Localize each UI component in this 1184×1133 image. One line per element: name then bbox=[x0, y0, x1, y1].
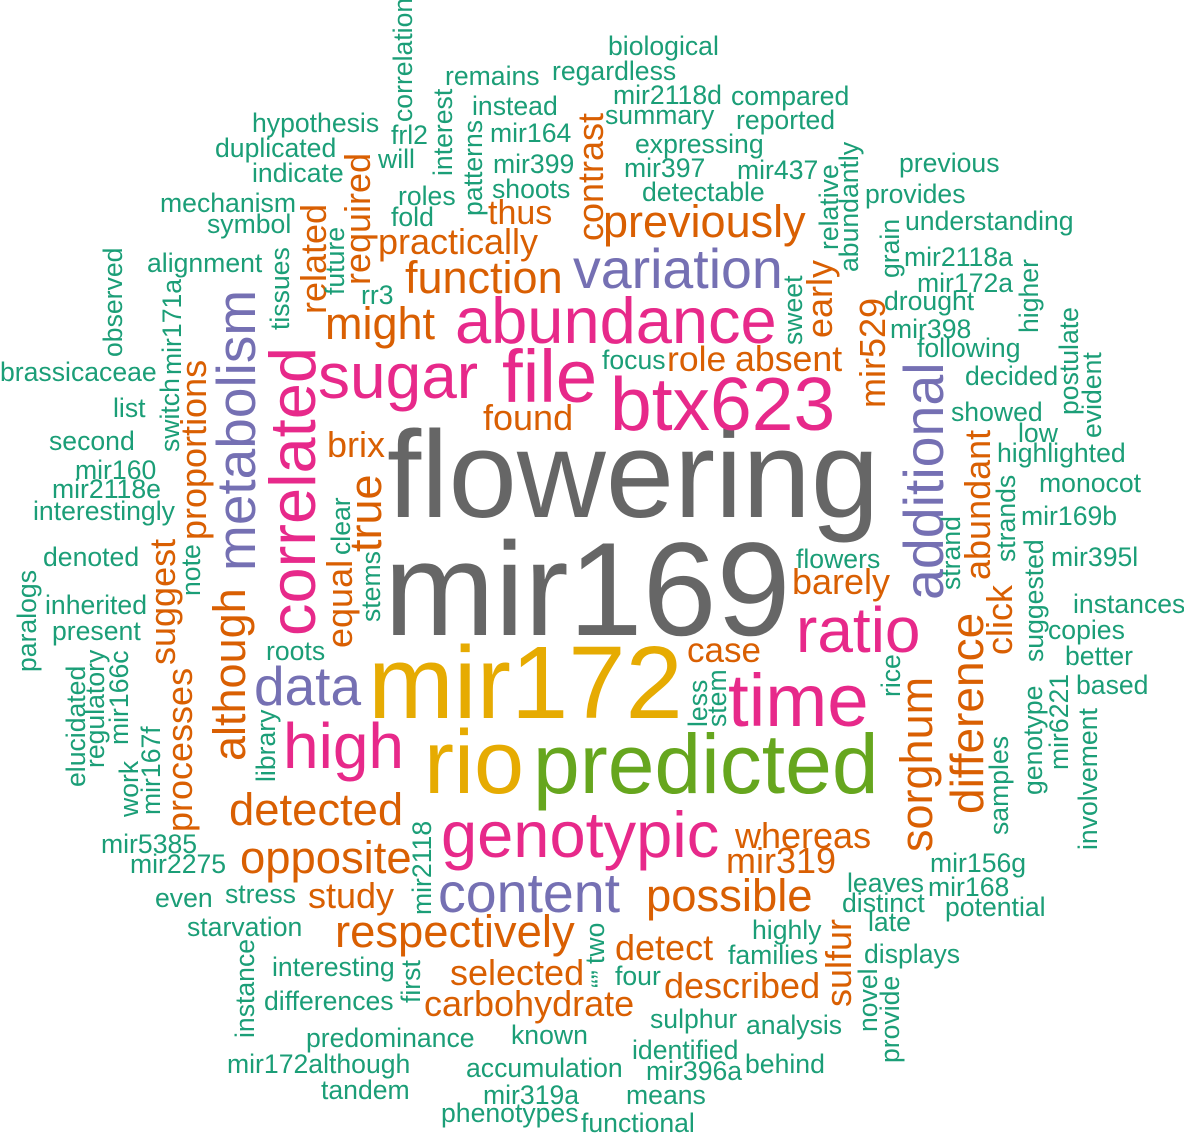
orange words: true bbox=[340, 474, 391, 552]
small green words, vertical: mir171a bbox=[157, 279, 187, 375]
pink words: abundance bbox=[455, 284, 777, 357]
small green words, vertical: “” bbox=[586, 970, 616, 988]
orange words: detect bbox=[615, 927, 713, 968]
small green words, horizontal: present bbox=[52, 616, 141, 646]
small green words, horizontal: compared bbox=[731, 81, 849, 111]
small green words, vertical: future bbox=[320, 227, 350, 295]
small green words, vertical: abundantly bbox=[834, 141, 864, 272]
small green words, horizontal: copies bbox=[1048, 615, 1125, 645]
small green words, horizontal: highlighted bbox=[997, 438, 1126, 468]
small green words, vertical: samples bbox=[984, 736, 1014, 835]
small green words, horizontal: showed bbox=[951, 397, 1043, 427]
small green words, vertical: mir2118 bbox=[407, 821, 437, 915]
small green words, horizontal: starvation bbox=[187, 912, 302, 942]
pink words: sugar bbox=[318, 340, 478, 412]
orange words: opposite bbox=[240, 832, 412, 883]
small green words, vertical: stem bbox=[702, 669, 732, 727]
small green words, horizontal: mir2275 bbox=[130, 849, 226, 879]
orange words: carbohydrate bbox=[424, 983, 634, 1024]
small green words, vertical: mir6221 bbox=[1044, 674, 1074, 770]
purple words: metabolism bbox=[205, 290, 267, 571]
small green words, horizontal: hypothesis bbox=[252, 108, 379, 138]
orange words: suggest bbox=[142, 539, 183, 665]
small green words, horizontal: fold bbox=[391, 202, 434, 232]
orange words: required bbox=[337, 153, 378, 285]
small green words, horizontal: previous bbox=[899, 148, 1000, 178]
small green words, horizontal: potential bbox=[945, 892, 1046, 922]
small green words, horizontal: sulphur bbox=[650, 1004, 737, 1034]
small green words, horizontal: duplicated bbox=[215, 133, 336, 163]
orange words: possible bbox=[646, 870, 813, 921]
orange words: sorghum bbox=[891, 677, 942, 852]
pink words: correlated bbox=[256, 347, 329, 636]
orange words: described bbox=[664, 965, 820, 1006]
small green words, horizontal: reported bbox=[736, 105, 835, 135]
small green words, horizontal: understanding bbox=[905, 206, 1074, 236]
small green words, horizontal: decided bbox=[965, 361, 1058, 391]
small green words, horizontal: displays bbox=[864, 939, 960, 969]
small green words, vertical: strands bbox=[991, 475, 1021, 562]
small green words, vertical: regulatory bbox=[80, 649, 110, 768]
small green words, horizontal: families bbox=[728, 940, 818, 970]
small green words, horizontal: inherited bbox=[45, 590, 147, 620]
small green words, vertical: observed bbox=[98, 248, 128, 357]
small green words, horizontal: focus bbox=[602, 345, 666, 375]
small green words, vertical: stems bbox=[356, 551, 386, 622]
small green words, horizontal: mir160 bbox=[75, 455, 156, 485]
small green words, vertical: mir167f bbox=[136, 726, 166, 815]
small green words, horizontal: phenotypes bbox=[441, 1098, 579, 1128]
small green words, horizontal: expressing bbox=[635, 129, 764, 159]
word: flowering: flowering bbox=[387, 407, 879, 544]
orange words: found bbox=[483, 397, 573, 438]
orange words: processes bbox=[159, 668, 200, 832]
orange words: brix bbox=[327, 424, 385, 465]
small green words, horizontal: mir399 bbox=[493, 149, 574, 179]
orange words: respectively bbox=[335, 906, 575, 957]
small green words, vertical: elucidated bbox=[61, 666, 91, 787]
small green words, horizontal: drought bbox=[884, 286, 975, 316]
small green words, horizontal: interesting bbox=[272, 952, 395, 982]
orange words: function bbox=[405, 252, 563, 303]
small green words, horizontal: mir172although bbox=[227, 1049, 410, 1079]
small green words, horizontal: highly bbox=[752, 915, 822, 945]
orange words: case bbox=[687, 631, 761, 670]
small green words, horizontal: known bbox=[511, 1020, 588, 1050]
small green words, horizontal: mir395l bbox=[1051, 542, 1138, 572]
purple words: content bbox=[438, 862, 621, 924]
orange words: sulfur bbox=[818, 919, 859, 1007]
small green words, vertical: correlation bbox=[388, 0, 418, 122]
small green words, vertical: first bbox=[396, 960, 426, 1003]
orange words: practically bbox=[378, 221, 538, 262]
small green words, vertical: relative bbox=[814, 164, 844, 250]
small green words, vertical: note bbox=[176, 544, 206, 596]
small green words, vertical: less bbox=[683, 680, 713, 727]
small green words, horizontal: instances bbox=[1073, 589, 1184, 619]
small green words, vertical: instance bbox=[230, 939, 260, 1038]
small green words, horizontal: roles bbox=[398, 181, 456, 211]
pink words bbox=[256, 284, 920, 871]
orange words bbox=[142, 113, 1020, 1024]
small green words, horizontal: detectable bbox=[642, 177, 765, 207]
small green words, horizontal: alignment bbox=[147, 248, 263, 278]
small green words, horizontal: instead bbox=[472, 91, 558, 121]
pink words: time bbox=[728, 659, 869, 742]
orange words: previously bbox=[603, 196, 806, 247]
small green words, horizontal: mir396a bbox=[646, 1056, 742, 1086]
small green words, horizontal: mir2118e bbox=[52, 474, 161, 504]
orange words: barely bbox=[792, 561, 890, 602]
small green words, horizontal: behind bbox=[745, 1049, 825, 1079]
small green words, horizontal: better bbox=[1065, 641, 1133, 671]
orange words: click bbox=[979, 584, 1020, 655]
small green words, horizontal: mir397 bbox=[624, 153, 705, 183]
orange words: proportions bbox=[173, 360, 214, 540]
small green words, vertical: two bbox=[580, 923, 610, 964]
small green words, horizontal: four bbox=[615, 961, 661, 991]
small green words, horizontal: summary bbox=[605, 100, 715, 130]
orange words: detected bbox=[229, 784, 403, 835]
small green words, horizontal: late bbox=[868, 907, 911, 937]
small green words, vertical: grain bbox=[875, 219, 905, 278]
small green words, horizontal: roots bbox=[266, 636, 325, 666]
small green words, horizontal: based bbox=[1076, 670, 1148, 700]
small green words, horizontal: regardless bbox=[552, 56, 676, 86]
small green words, vertical: patterns bbox=[458, 120, 488, 216]
small green words, horizontal: analysis bbox=[746, 1010, 842, 1040]
word: mir169: mir169 bbox=[384, 516, 791, 664]
small green words, vertical: work bbox=[114, 760, 144, 818]
orange words: whereas bbox=[734, 815, 871, 856]
purple words: additional bbox=[893, 362, 955, 600]
small green words, vertical: provide bbox=[875, 976, 905, 1063]
small green words, horizontal: rr3 bbox=[361, 280, 394, 310]
small green words, vertical: rice bbox=[876, 654, 906, 697]
orange words: equal bbox=[319, 560, 360, 648]
small green words, horizontal: identified bbox=[632, 1035, 738, 1065]
small green words, horizontal: following bbox=[917, 333, 1020, 363]
orange words: thus bbox=[488, 194, 552, 232]
pink words: btx623 bbox=[610, 362, 835, 446]
orange words: related bbox=[293, 204, 334, 314]
small green words, horizontal: means bbox=[626, 1080, 706, 1110]
small green words, horizontal: mechanism bbox=[160, 188, 296, 218]
small green words, horizontal: flowers bbox=[796, 544, 880, 574]
small green words, vertical: genotype bbox=[1018, 686, 1048, 795]
small green words, horizontal: mir168 bbox=[928, 872, 1009, 902]
orange words: study bbox=[308, 875, 394, 916]
small green words, horizontal: mir2118a bbox=[904, 242, 1013, 272]
small green words, horizontal: low bbox=[1018, 418, 1059, 448]
small green words, horizontal: mir169b bbox=[1021, 501, 1117, 531]
orange words: role bbox=[667, 339, 726, 379]
small green words, horizontal: differences bbox=[264, 986, 394, 1016]
word: mir172: mir172 bbox=[368, 625, 683, 740]
small green words, horizontal: mir2118d bbox=[613, 80, 722, 110]
small green words, horizontal: accumulation bbox=[466, 1053, 623, 1083]
small green words, horizontal: indicate bbox=[252, 158, 344, 188]
small green words, horizontal: denoted bbox=[43, 542, 139, 572]
pink words: file bbox=[502, 335, 597, 418]
word: predicted: predicted bbox=[533, 717, 879, 811]
small green words, vertical: tissues bbox=[265, 247, 295, 330]
orange words: abundant bbox=[957, 430, 998, 580]
small green words, horizontal: will bbox=[377, 144, 415, 174]
small green words, vertical: suggested bbox=[1019, 539, 1049, 662]
orange words: mir319 bbox=[726, 840, 836, 881]
orange words: absent bbox=[735, 339, 842, 379]
small green words, horizontal: shoots bbox=[492, 174, 570, 204]
purple words: variation bbox=[573, 238, 783, 300]
pink words: genotypic bbox=[441, 798, 719, 871]
small green words, vertical: library bbox=[251, 709, 281, 782]
small green words, horizontal: biological bbox=[608, 31, 719, 61]
purple words: data bbox=[254, 655, 361, 717]
small green words, horizontal: remains bbox=[445, 61, 540, 91]
small green words, horizontal: mir164 bbox=[490, 118, 571, 148]
small green words, vertical: postulate bbox=[1054, 307, 1084, 415]
small green words, horizontal: leaves bbox=[847, 868, 924, 898]
orange words: difference bbox=[941, 613, 993, 814]
small green words, horizontal: second bbox=[49, 426, 135, 456]
small green words, horizontal: frl2 bbox=[391, 120, 428, 150]
small green words, vertical: strand bbox=[936, 516, 966, 590]
small green words, horizontal: distinct bbox=[842, 888, 925, 918]
small green words, vertical: mir166c bbox=[104, 650, 134, 745]
orange words: early bbox=[799, 260, 840, 338]
orange words: although bbox=[204, 588, 255, 761]
small green words, vertical: evident bbox=[1077, 352, 1107, 438]
small green words, horizontal: provides bbox=[865, 179, 966, 209]
small green words, vertical: sweet bbox=[778, 275, 808, 345]
small green words, horizontal: mir437 bbox=[737, 155, 818, 185]
orange words: might bbox=[325, 298, 436, 349]
orange words: selected bbox=[450, 952, 584, 993]
small green words, vertical: interest bbox=[428, 88, 458, 176]
small green words, horizontal: brassicaceae bbox=[0, 357, 157, 387]
small green words, horizontal: list bbox=[113, 393, 146, 423]
pink words: high bbox=[283, 710, 404, 782]
orange words: contrast bbox=[570, 113, 611, 241]
small green words, horizontal: mir156g bbox=[930, 848, 1026, 878]
small green words, vertical: switch bbox=[155, 378, 185, 452]
small green words, horizontal: mir319a bbox=[483, 1080, 579, 1110]
small green words, horizontal: symbol bbox=[207, 209, 291, 239]
small green words, horizontal: mir5385 bbox=[101, 829, 197, 859]
small green words, vertical: higher bbox=[1014, 259, 1044, 333]
word: rio: rio bbox=[424, 713, 524, 813]
purple words bbox=[205, 238, 955, 924]
small green words, horizontal: stress bbox=[225, 879, 296, 909]
small green words, horizontal: mir398 bbox=[890, 314, 971, 344]
small green words, horizontal: interestingly bbox=[33, 496, 176, 526]
small green words, vertical: clear bbox=[326, 497, 356, 555]
small green words, horizontal: predominance bbox=[306, 1023, 475, 1053]
orange words: mir529 bbox=[852, 298, 893, 408]
small green words, horizontal: mir172a bbox=[917, 268, 1013, 298]
pink words: ratio bbox=[796, 594, 920, 666]
small green words, vertical: novel bbox=[853, 968, 883, 1032]
small green words, horizontal: monocot bbox=[1039, 468, 1142, 498]
small green words, vertical: paralogs bbox=[12, 570, 42, 672]
small green words, horizontal: tandem bbox=[321, 1075, 410, 1105]
small green words, horizontal: even bbox=[155, 883, 213, 913]
small green words, vertical: involvement bbox=[1073, 707, 1103, 850]
